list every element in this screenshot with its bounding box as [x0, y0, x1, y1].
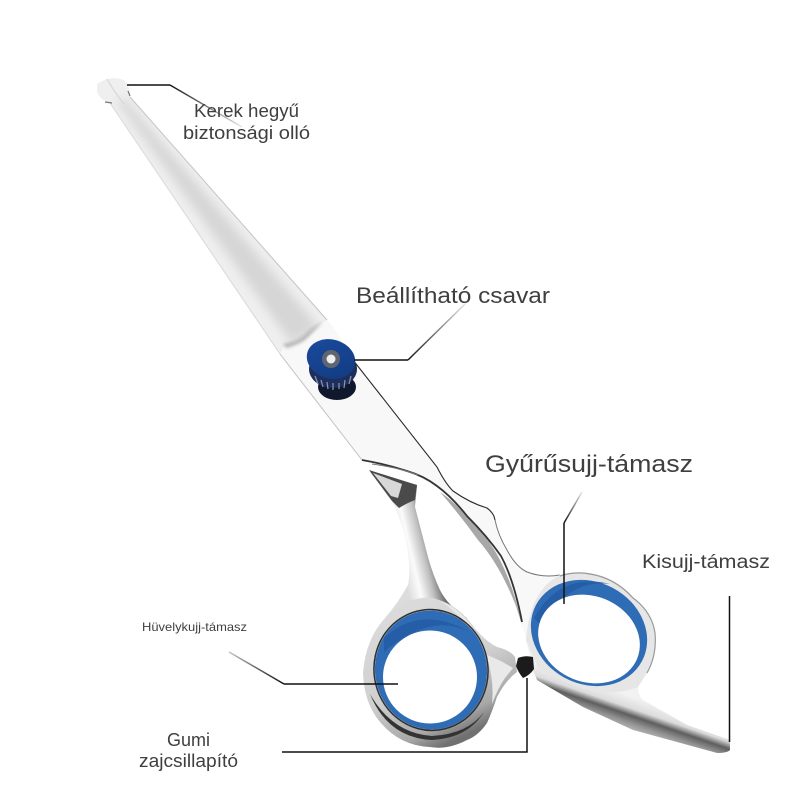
callout: rounded tip: [127, 85, 310, 143]
callout: rounded tip: biztonsági olló: [183, 123, 310, 143]
finger ring liner shadow: [534, 582, 610, 625]
label: Gumi: [167, 730, 210, 750]
thumb ring highlight: [440, 601, 513, 704]
screw knurl ticks: [315, 376, 351, 390]
label: Beállítható csavar: [356, 283, 551, 308]
thumb ring opening: [383, 630, 477, 724]
finger ring silver frame: [526, 572, 655, 692]
upper blade: [97, 78, 336, 362]
thumb ring blue liner: [367, 603, 495, 737]
callout: adjustable screw: [354, 283, 551, 360]
leader line: [728, 596, 730, 742]
infographic: scissors anatomy: [97, 78, 769, 771]
thumb ring bottom bevel: [370, 694, 484, 740]
label: Kerek hegyű: [194, 101, 299, 121]
thumb ring liner shadow: [384, 619, 470, 652]
scissors illustration: [97, 78, 730, 753]
blade right edge line: [353, 360, 495, 520]
arm shading: [440, 492, 522, 625]
label: Kisujj-támasz: [642, 552, 770, 573]
callout: ring finger rest: [485, 451, 693, 604]
screw shadow: [318, 374, 356, 400]
shank inner recess: [369, 470, 417, 508]
finger ring opening: [525, 580, 653, 698]
callout: thumb rest: [142, 620, 398, 684]
leader line: [127, 84, 170, 86]
thumb ring dark rim: [366, 602, 496, 738]
screw bolt: [322, 350, 340, 368]
leader line: [354, 359, 408, 361]
leader line: [282, 678, 527, 752]
finger ring blue liner: [512, 560, 666, 706]
callout: rubber silencer: zajcsillapító: [139, 751, 238, 771]
blade shoulder bevel: [283, 322, 323, 348]
callout: rubber silencer: [139, 678, 527, 771]
finger ring and tail: [526, 572, 730, 753]
blade tip fold: [107, 79, 124, 104]
blade edges: [130, 97, 327, 320]
thumb ring: [363, 598, 517, 748]
label: Gyűrűsujj-támasz: [485, 451, 693, 478]
lower arm dark band: [362, 460, 522, 622]
finger ring top rim: [560, 573, 655, 673]
leader line: [563, 523, 565, 604]
blade central shading: [116, 100, 318, 344]
rubber silencer: [516, 656, 534, 678]
leader line: [284, 683, 398, 685]
label: Hüvelykujj-támasz: [142, 620, 247, 634]
adjustable screw: [302, 334, 360, 400]
lower arm and pivot plate: [280, 320, 560, 650]
screw knurled side: [309, 350, 357, 388]
thumb shank: [370, 472, 467, 618]
screw cap: [302, 334, 360, 384]
